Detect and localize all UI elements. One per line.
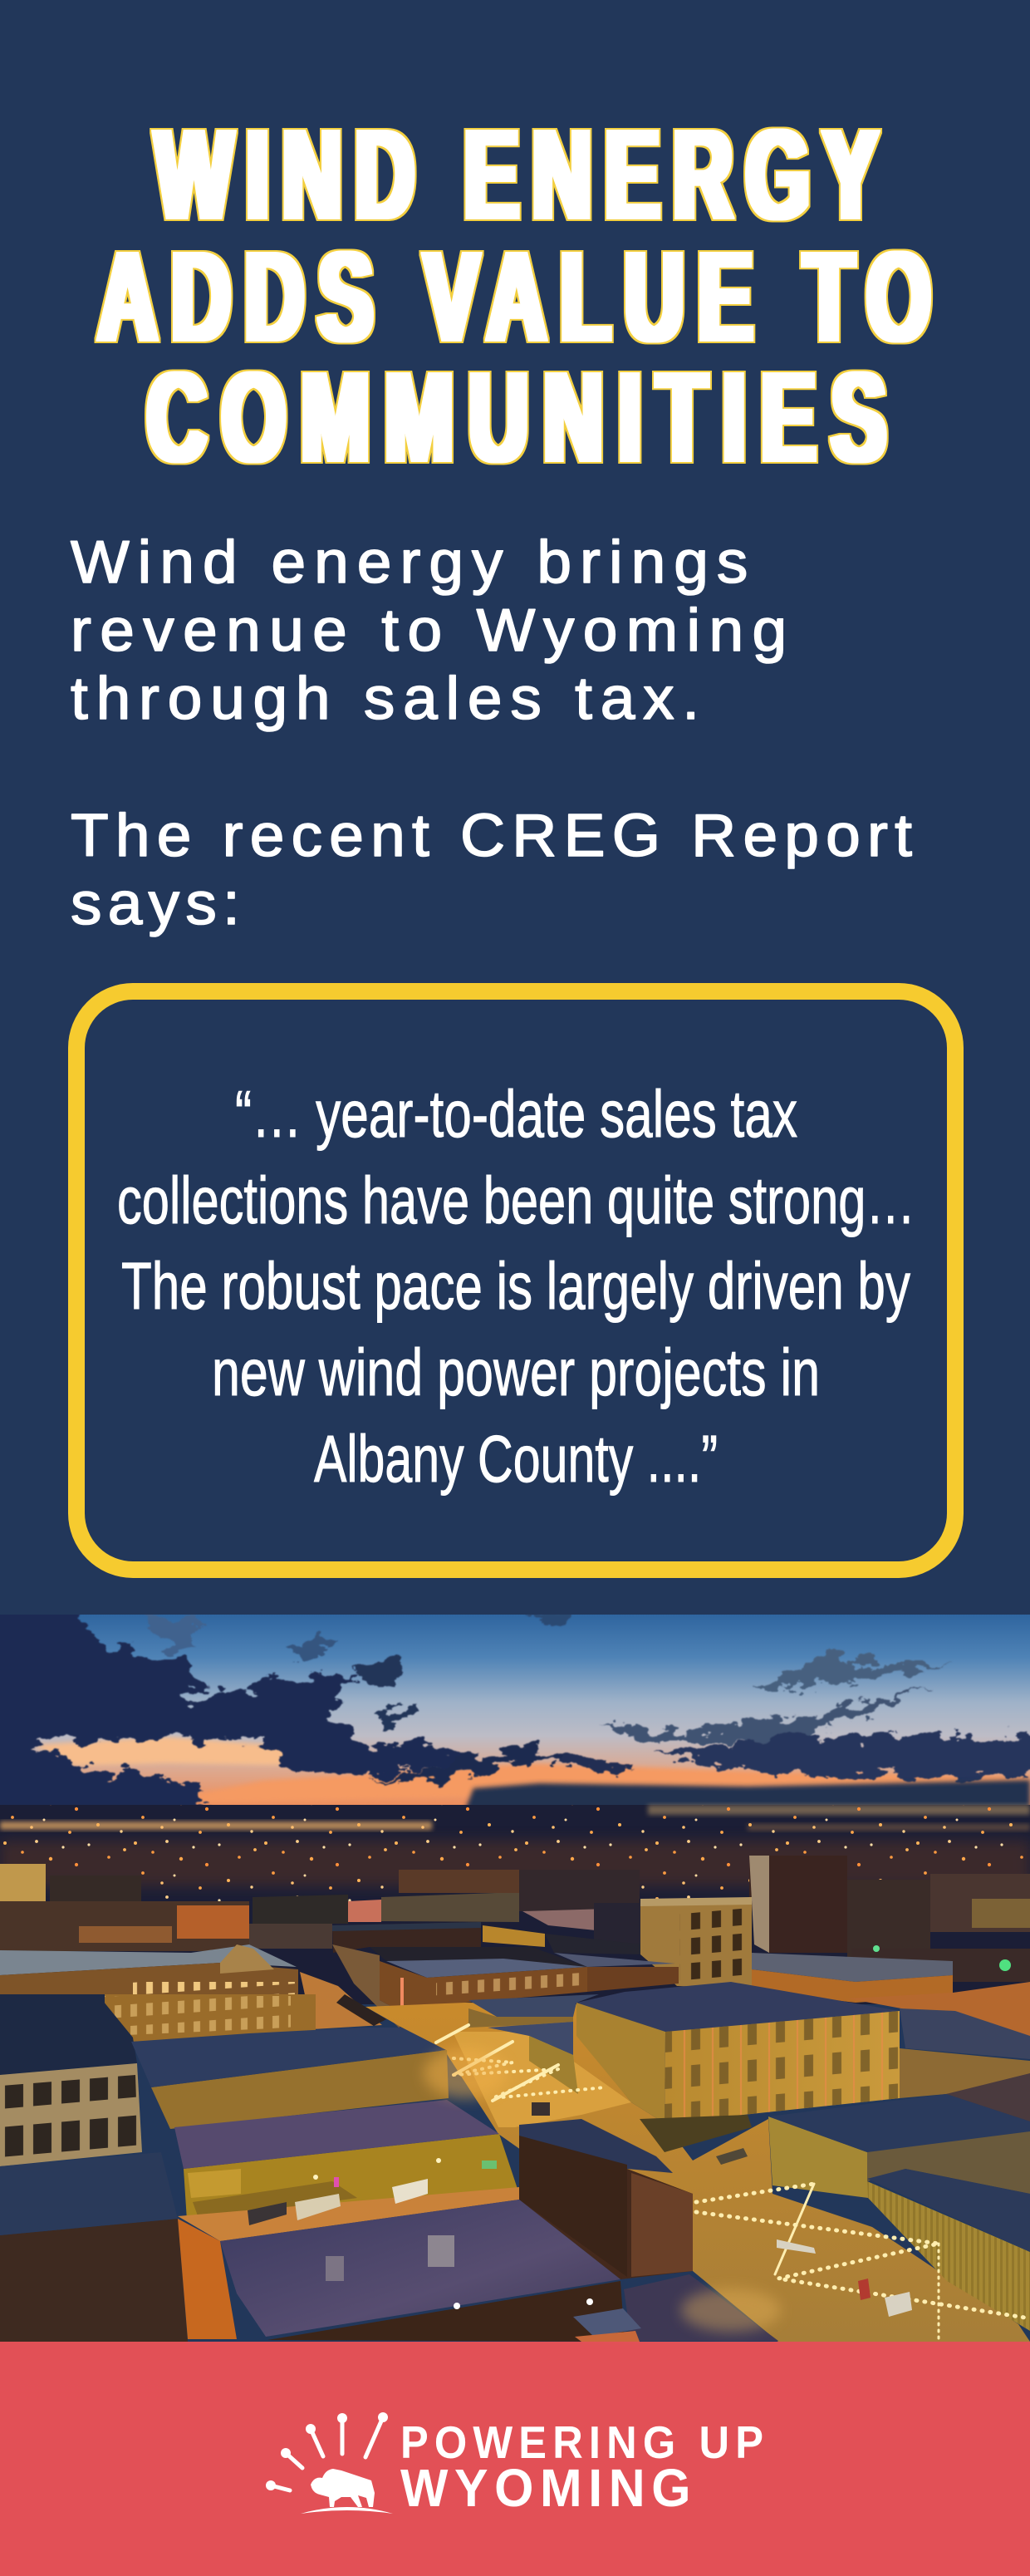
wordmark: WYOMING bbox=[400, 2459, 691, 2518]
orange streets bbox=[300, 1944, 1030, 2342]
title bbox=[98, 104, 930, 489]
icon: sun rays bbox=[266, 2412, 388, 2490]
title: COMMUNITIES bbox=[147, 347, 886, 489]
intro text: revenue to Wyoming bbox=[71, 597, 787, 664]
photo: aerial dusk view of downtown bbox=[0, 1600, 1030, 2342]
right corner buildings bbox=[900, 2008, 1030, 2121]
large purple roof bbox=[220, 2200, 625, 2342]
orange alley bbox=[178, 2219, 237, 2339]
wordmark: POWERING UP bbox=[400, 2417, 763, 2468]
tan building with dark roof bbox=[131, 2028, 449, 2129]
big yellow building bbox=[576, 1982, 900, 2152]
quote text bbox=[117, 1077, 915, 1496]
warm glow highlights bbox=[313, 1945, 1011, 2332]
yellow-lit storefront building bbox=[174, 2100, 519, 2220]
historic brick block lower left bbox=[0, 1944, 298, 1994]
footer band bbox=[0, 2342, 1030, 2576]
intro text bbox=[71, 528, 912, 937]
sidewalk and parked cars bbox=[178, 2179, 519, 2241]
sky at dusk bbox=[0, 1615, 1030, 1805]
lower roof and awning bbox=[573, 2274, 778, 2342]
intro text: The recent CREG Report bbox=[71, 802, 912, 869]
quote text: Albany County ....” bbox=[314, 1422, 718, 1496]
icon: bison on a hill bbox=[301, 2469, 393, 2514]
cream building left bbox=[0, 1994, 316, 2166]
dark brick corner left bbox=[0, 2152, 188, 2342]
title: ADDS VALUE TO bbox=[98, 226, 930, 368]
mid-distance buildings and lit streets bbox=[0, 1864, 1030, 1982]
quote text: new wind power projects in bbox=[212, 1335, 820, 1409]
intro text: through sales tax. bbox=[71, 665, 699, 732]
intro text: Wind energy brings bbox=[71, 528, 748, 596]
navy background panel bbox=[0, 0, 1030, 1616]
low orange building right bbox=[752, 1953, 1030, 2038]
intro text: says: bbox=[71, 870, 240, 937]
brick tower centre bbox=[519, 2119, 693, 2279]
distant city lights bbox=[0, 1805, 1030, 2004]
string lights bbox=[436, 2025, 1030, 2342]
logo: Powering Up Wyoming bbox=[266, 2412, 763, 2518]
gold metal building right bbox=[768, 2094, 1030, 2331]
wordmark bbox=[400, 2417, 763, 2518]
street cars bbox=[336, 1994, 912, 2317]
quote text: “… year-to-date sales tax bbox=[235, 1077, 797, 1151]
windowed brick building bbox=[640, 1897, 752, 1989]
quote callout box bbox=[76, 991, 955, 1570]
title: WIND ENERGY bbox=[155, 104, 878, 246]
tower with cream strip bbox=[749, 1856, 847, 1953]
mid roofs by the street bbox=[468, 1994, 599, 2094]
brick building centre bbox=[380, 1953, 679, 2006]
